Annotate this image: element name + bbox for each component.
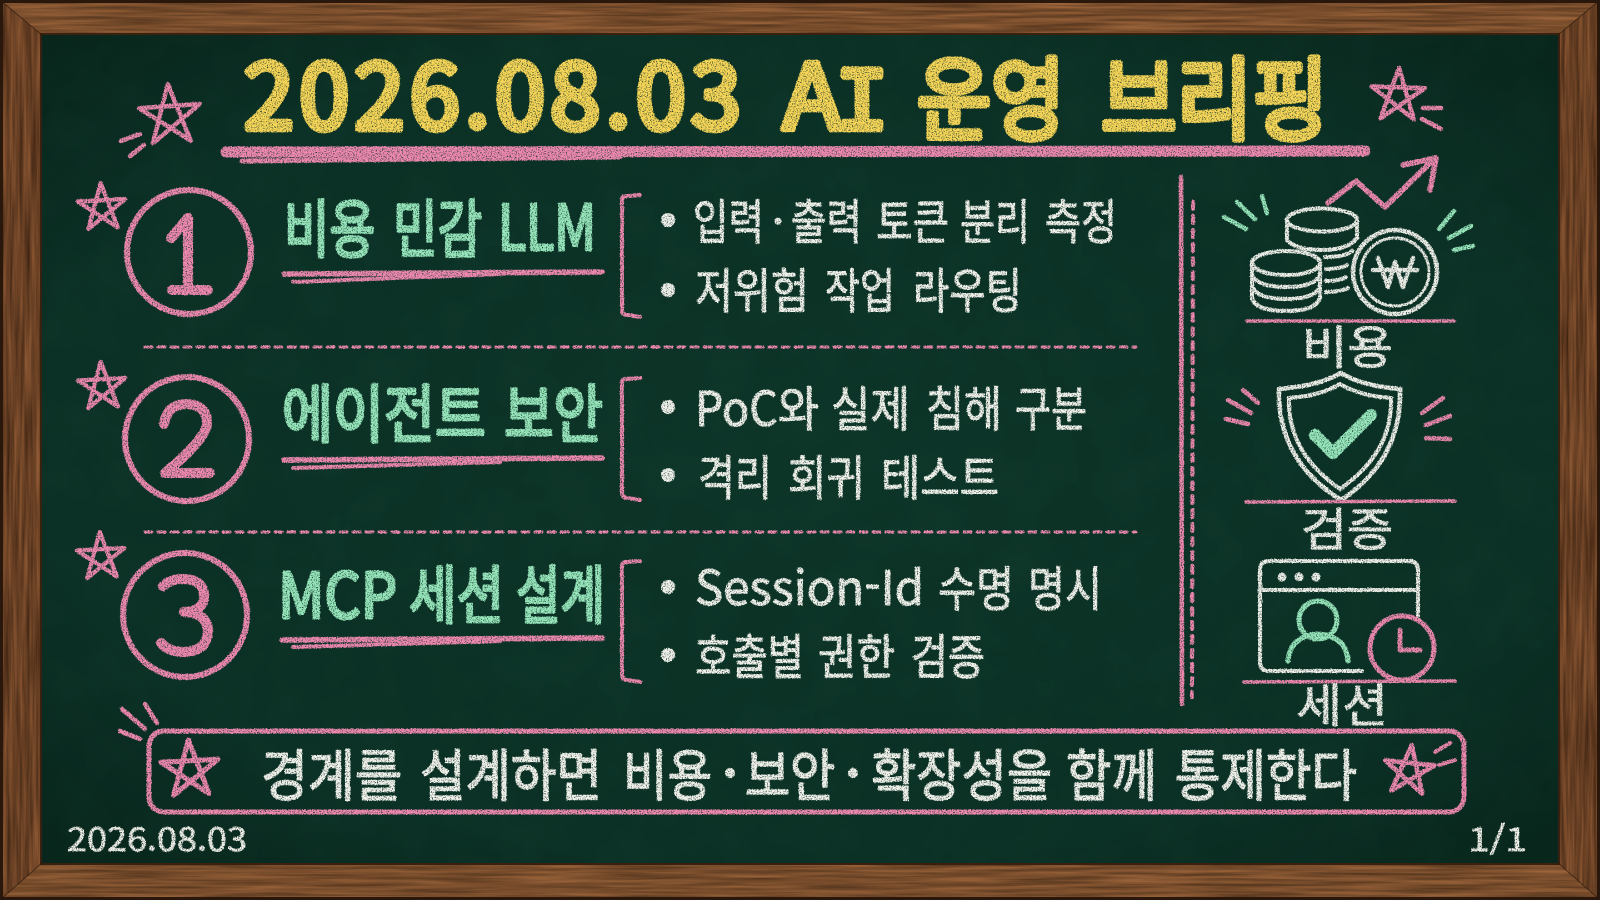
section 2 bullets: 테스트 [881, 439, 999, 509]
section 3 heading: 세션 [409, 546, 504, 637]
section 3 bullets: 권한 [818, 618, 895, 688]
callout text [261, 732, 1357, 813]
divider 1 [145, 346, 1136, 348]
title: A [783, 25, 841, 155]
cost label: 비용 [1302, 312, 1393, 378]
section 2 bullets: 격리 [698, 439, 772, 509]
callout text: 함께 [1066, 732, 1157, 813]
section 1 bullets: 출력 [791, 183, 862, 253]
callout text: 비용 [623, 732, 712, 813]
icon: cost coins with rising arrow [1224, 158, 1473, 314]
section 3 bullets: 호출별 [695, 618, 804, 688]
section 1 heading: 비용 [284, 180, 375, 271]
section 1 bullets: 저위험 [695, 252, 809, 322]
section 3 bullets: 검증 [911, 618, 985, 688]
section 3 star [76, 531, 126, 578]
title: 운영 [917, 28, 1065, 158]
icon: front coin stack [1252, 251, 1320, 311]
page number: 1/1 [1468, 815, 1527, 861]
section 1 number badge [127, 190, 251, 314]
section 2 heading underline [284, 458, 602, 468]
section 1 bullets: 분리 [960, 183, 1030, 253]
section 2 bullets: 침해 [926, 370, 1002, 440]
section 1 heading: 민감 [393, 180, 482, 271]
section 3 number badge [123, 553, 247, 677]
title: I [835, 55, 889, 157]
section 2 star [77, 361, 127, 408]
callout: conclusion [120, 704, 1464, 813]
callout text: 경계를 [261, 732, 402, 813]
icon: won coin [1353, 230, 1437, 314]
callout text: 확장성을 [871, 732, 1052, 813]
section 3 bullets: 명시 [1028, 550, 1102, 620]
section 2 bullets: 실제 [831, 370, 910, 440]
star: title left [121, 82, 202, 156]
session label: 세션 [1296, 670, 1388, 736]
callout sparks left [120, 704, 157, 739]
title: 브리핑 [1101, 28, 1328, 158]
section 3 heading: MCP [278, 546, 397, 637]
title [244, 25, 1328, 158]
title underline [226, 151, 1365, 161]
icon: rising arrow [1328, 158, 1436, 207]
vertical separator [1181, 177, 1193, 704]
section 1 bullets: 입력 [693, 183, 764, 253]
section 2 heading: 보안 [504, 365, 603, 456]
section 3 bracket [622, 561, 640, 682]
icon: back coin stack [1287, 208, 1357, 292]
callout text: 통제한다 [1175, 732, 1357, 813]
section 3 bullets [661, 549, 1102, 688]
section 2 bullets: PoC와 [695, 370, 819, 440]
session label underline [1244, 681, 1455, 682]
section 1 bullets [661, 183, 1117, 322]
title: 2026.08.03 [244, 25, 741, 155]
section 3 heading underline [282, 638, 602, 647]
section 1 bullets: 측정 [1045, 183, 1117, 253]
section 2 bracket [622, 378, 640, 500]
icon: session window with user and clock [1260, 561, 1434, 680]
section 3 bullets: Session-Id [695, 549, 924, 619]
callout star left [160, 739, 220, 796]
callout sparks right [1435, 743, 1455, 765]
section 1 heading underline [284, 272, 602, 282]
section 2 number badge [125, 377, 249, 501]
icon: verification shield [1226, 373, 1450, 500]
section 2 heading: 에이전트 [282, 365, 486, 456]
section 2 bullets: 구분 [1015, 370, 1087, 440]
icon: green sparks [1224, 196, 1473, 250]
section 3 heading [278, 546, 605, 637]
verification label underline [1246, 501, 1455, 502]
cost label underline [1247, 319, 1454, 323]
section 3 heading: 설계 [516, 546, 605, 637]
section 3 bullets: 수명 [938, 550, 1014, 620]
divider 2 [145, 530, 1136, 534]
section 1 bullets: 토큰 [876, 183, 949, 253]
section 1 heading [284, 178, 596, 271]
section 1 star [77, 182, 127, 229]
callout text: 보안 [745, 732, 835, 813]
verification label: 검증 [1301, 494, 1393, 560]
section 1 heading: LLM [498, 178, 596, 269]
star: title right [1371, 67, 1441, 129]
section 1 bullets: 라우팅 [913, 252, 1022, 322]
callout star right [1382, 743, 1436, 795]
callout text: 설계하면 [420, 732, 602, 813]
section 1 bullets: 작업 [825, 252, 895, 322]
section 1 bracket [622, 195, 640, 317]
footer date: 2026.08.03 [67, 815, 247, 861]
section 2 bullets: 회귀 [788, 439, 865, 509]
section 2 bullets [661, 370, 1087, 509]
